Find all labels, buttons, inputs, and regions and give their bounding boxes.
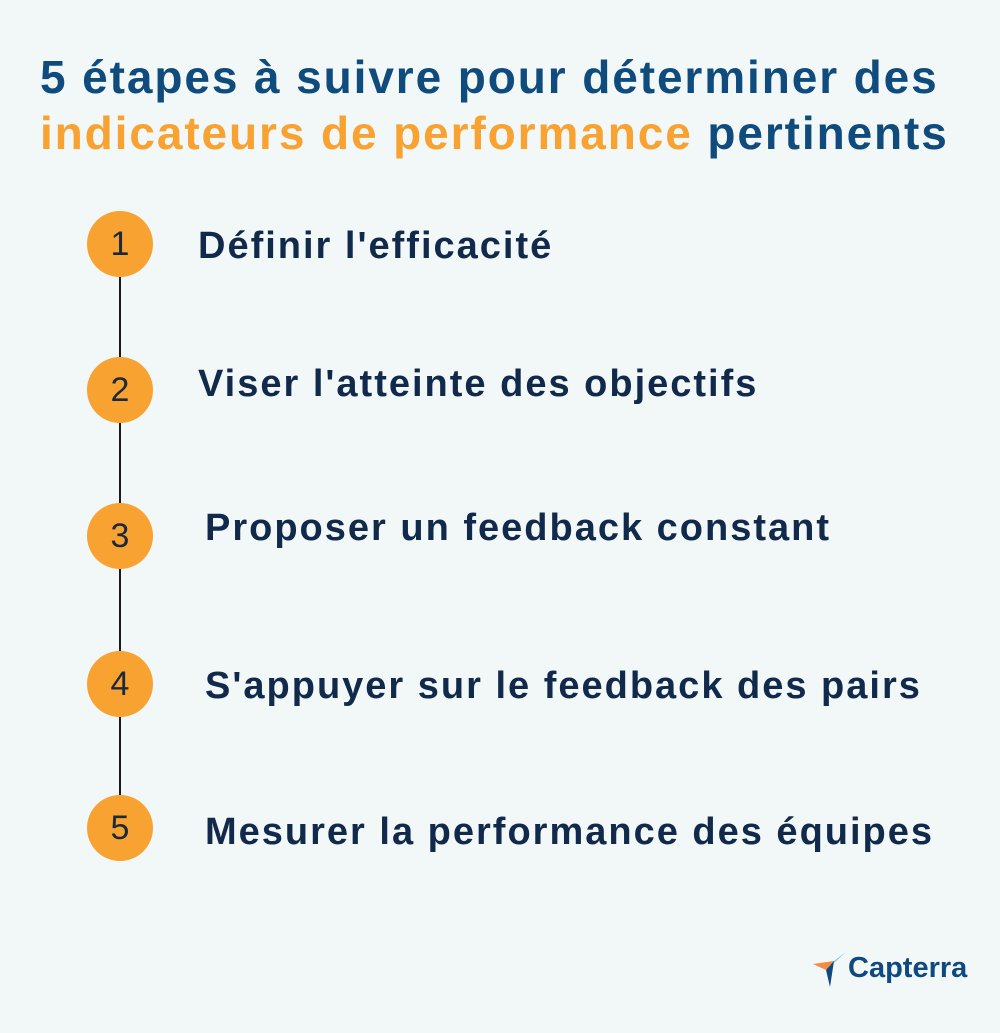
icon: circle 4: 4: [111, 665, 129, 703]
icon: circle 3: [87, 503, 153, 569]
icon: circle 5: 5: [111, 809, 129, 847]
icon: circle 2: 2: [111, 371, 129, 409]
text 4: S'appuyer sur le feedback des pairs: [205, 665, 922, 707]
step 4: [87, 651, 922, 717]
step 2: [87, 357, 758, 423]
icon: circle 2: [87, 357, 153, 423]
icon: circle 3: 3: [111, 517, 129, 555]
icon: circle 1: [87, 211, 153, 277]
step 1: [87, 211, 553, 277]
icon: circle 1: 1: [111, 225, 129, 263]
step 3: [87, 503, 831, 569]
title: 5 étapes à suivre pour déterminer des: [40, 51, 939, 103]
step 5: [87, 795, 934, 861]
text 5: Mesurer la performance des équipes: [205, 811, 934, 853]
title: indicateurs de performance pertinents: [40, 107, 949, 159]
title: [40, 51, 949, 159]
text 1: Définir l'efficacité: [198, 225, 553, 267]
timeline line: [119, 270, 121, 810]
logo: Capterra: Capterra: [848, 952, 967, 984]
text 3: Proposer un feedback constant: [205, 507, 831, 549]
icon: circle 4: [87, 651, 153, 717]
icon: circle 5: [87, 795, 153, 861]
text 2: Viser l'atteinte des objectifs: [198, 363, 758, 405]
